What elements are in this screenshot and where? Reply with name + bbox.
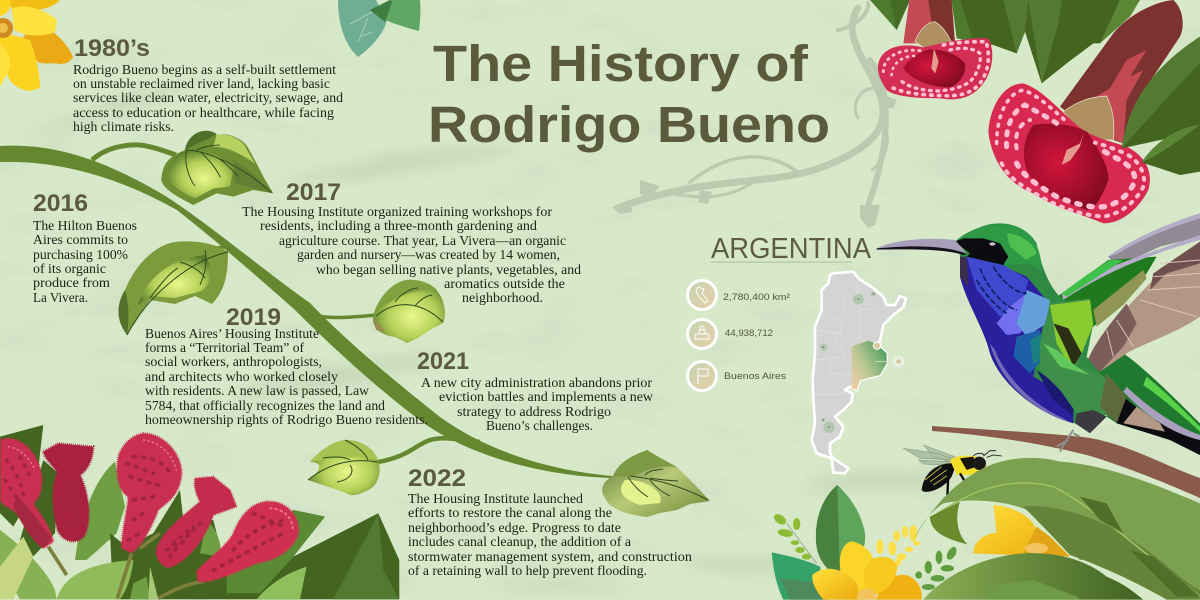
bottom left foliage: [0, 425, 399, 599]
vine: timeline stem: [0, 145, 613, 478]
year heading: 1980’s: [74, 35, 150, 62]
body text: high climate risks.: [73, 120, 174, 135]
panel: Argentina: [688, 233, 906, 473]
body text: access to education or healthcare, while facing: [73, 106, 334, 121]
breast green: [1040, 298, 1127, 417]
timeline entry: 2022: [408, 465, 692, 579]
year heading: 2021: [417, 348, 469, 375]
body text: services like clean water, electricity, sewage, and: [73, 91, 343, 106]
body text: The Housing Institute launched: [408, 492, 583, 507]
icon: large red flower: [988, 0, 1183, 223]
branch: to 1980's leaf: [92, 145, 176, 160]
body text: 5784, that officially recognizes the land and: [145, 399, 385, 414]
spike mottling: [5, 457, 287, 570]
body text: The Hilton Buenos: [33, 219, 137, 234]
body text: agriculture course. That year, La Vivera—an organic: [279, 234, 566, 249]
map of Argentina: [812, 272, 906, 473]
head: [955, 225, 1042, 270]
tail: [1093, 353, 1200, 455]
back leaves: [0, 425, 43, 527]
body text: of its organic: [33, 262, 106, 277]
branch under hummingbird: [932, 426, 1200, 498]
icon: small red flower: [878, 0, 992, 99]
flower lip: [988, 83, 1150, 223]
leaf: 2022 right node: [602, 450, 710, 517]
petal spots: [997, 90, 1144, 217]
body text: social workers, anthropologists,: [145, 355, 322, 370]
icon: hummingbird: [877, 213, 1200, 455]
body text: [145, 327, 428, 428]
big curved leaf: [913, 458, 1200, 600]
icon: bee: [903, 445, 1002, 498]
top right foliage: [870, 0, 1140, 83]
body text: strategy to address Rodrigo: [457, 405, 611, 420]
body text: eviction battles and implements a new: [439, 390, 654, 405]
yellow sprig: [876, 525, 920, 566]
year heading: 2017: [286, 179, 341, 206]
year heading: 2016: [33, 190, 88, 217]
body text: neighborhood’s edge. Progress to date: [408, 521, 621, 536]
body text: aromatics outside the: [444, 277, 565, 292]
timeline entry: 2021: [417, 348, 654, 434]
stat: population: 44,938,712: [725, 328, 773, 339]
wing green coverts: [1050, 257, 1157, 340]
leaf: 2022 left node: [308, 440, 380, 495]
body text: neighborhood.: [462, 291, 543, 306]
sprigs: [772, 512, 811, 560]
country heading: ARGENTINA: [711, 233, 872, 265]
red flower spikes: [1, 433, 298, 582]
body text: homeownership rights of Rodrigo Bueno residents.: [145, 413, 428, 428]
wing brown feathers: [1087, 243, 1200, 372]
silhouette vine behind the title: [612, 3, 897, 228]
body text: purchasing 100%: [33, 248, 128, 263]
body text: Bueno’s challenges.: [486, 419, 593, 434]
year heading: 2022: [408, 465, 466, 492]
leaf: 1980's node: [161, 131, 273, 205]
icon: top centre leaves: [338, 0, 420, 57]
leaf: 2016 node: [118, 241, 228, 335]
body text: stormwater management system, and construction: [408, 550, 692, 565]
body text: includes canal cleanup, the addition of a: [408, 535, 632, 550]
title: The History of: [433, 35, 809, 92]
body text: [242, 205, 581, 306]
body text: who began selling native plants, vegetables, and: [316, 263, 581, 278]
icon: top-left yellow flower: [0, 0, 73, 91]
stat: capital: Buenos Aires: [724, 371, 786, 382]
body text: Aires commits to: [33, 233, 128, 248]
body text: Buenos Aires’ Housing Institute: [145, 327, 319, 342]
body text: [73, 63, 343, 135]
branch: to 2016 leaf: [198, 246, 232, 255]
teal leaf: [772, 552, 827, 600]
flower tube: [903, 0, 955, 43]
timeline entry: 2016: [33, 190, 137, 306]
branch: to 2022 left leaf: [378, 438, 480, 462]
body text: [33, 219, 137, 306]
body text: on unstable reclaimed river land, lacking basic: [73, 77, 330, 92]
stat: area: 2,780,400 km²: [723, 292, 790, 303]
Buenos Aires province highlight: [852, 341, 887, 390]
body text: La Vivera.: [33, 291, 88, 306]
timeline entry: 2017: [242, 179, 581, 306]
stat: population: [688, 320, 773, 348]
body text: with residents. A new law is passed, Law: [145, 384, 370, 399]
branch: to 2017 leaf: [318, 315, 376, 318]
body text: produce from: [33, 276, 110, 291]
legs: [947, 472, 985, 498]
body text: of a retaining wall to help prevent flooding.: [408, 564, 647, 579]
wing far grey feathers: [1108, 213, 1200, 267]
body text: [421, 376, 654, 434]
year heading: 2019: [226, 304, 281, 331]
body text: garden and nursery—was created by 14 women,: [297, 248, 560, 263]
yellow flower left: [840, 541, 875, 600]
stat: area: [688, 280, 790, 310]
body text: A new city administration abandons prior: [421, 376, 652, 391]
stat: capital: [688, 362, 786, 390]
thorax: [950, 456, 987, 475]
stems: [48, 533, 203, 598]
yellow flower right: [973, 505, 1060, 557]
flower tube: [1060, 0, 1183, 143]
body text: residents, including a three-month gardening and: [260, 219, 537, 234]
timeline entry: 2019: [145, 304, 428, 428]
lower front leaf: [923, 553, 1143, 600]
body: [955, 223, 1127, 423]
head: [973, 457, 986, 470]
abdomen: [922, 463, 957, 492]
beak: [877, 239, 967, 253]
leaf: 2017 node: [373, 280, 445, 343]
body text: and architects who worked closely: [145, 370, 338, 385]
timeline entry: 1980's: [73, 35, 343, 135]
body text: The Housing Institute organized training workshops for: [242, 205, 552, 220]
petal spots: [883, 42, 988, 96]
body text: efforts to restore the canal along the: [408, 506, 612, 521]
body text: [408, 492, 692, 579]
flower lip: [878, 38, 992, 99]
right-edge leaves: [1122, 37, 1200, 175]
tall green leaf: [816, 485, 865, 580]
wings: [903, 445, 955, 465]
body text: forms a “Territorial Team” of: [145, 341, 304, 356]
title: [428, 35, 830, 153]
body text: Rodrigo Bueno begins as a self-built settlement: [73, 63, 336, 78]
title: Rodrigo Bueno: [428, 96, 830, 153]
bottom right foliage and flowers: [772, 458, 1200, 600]
